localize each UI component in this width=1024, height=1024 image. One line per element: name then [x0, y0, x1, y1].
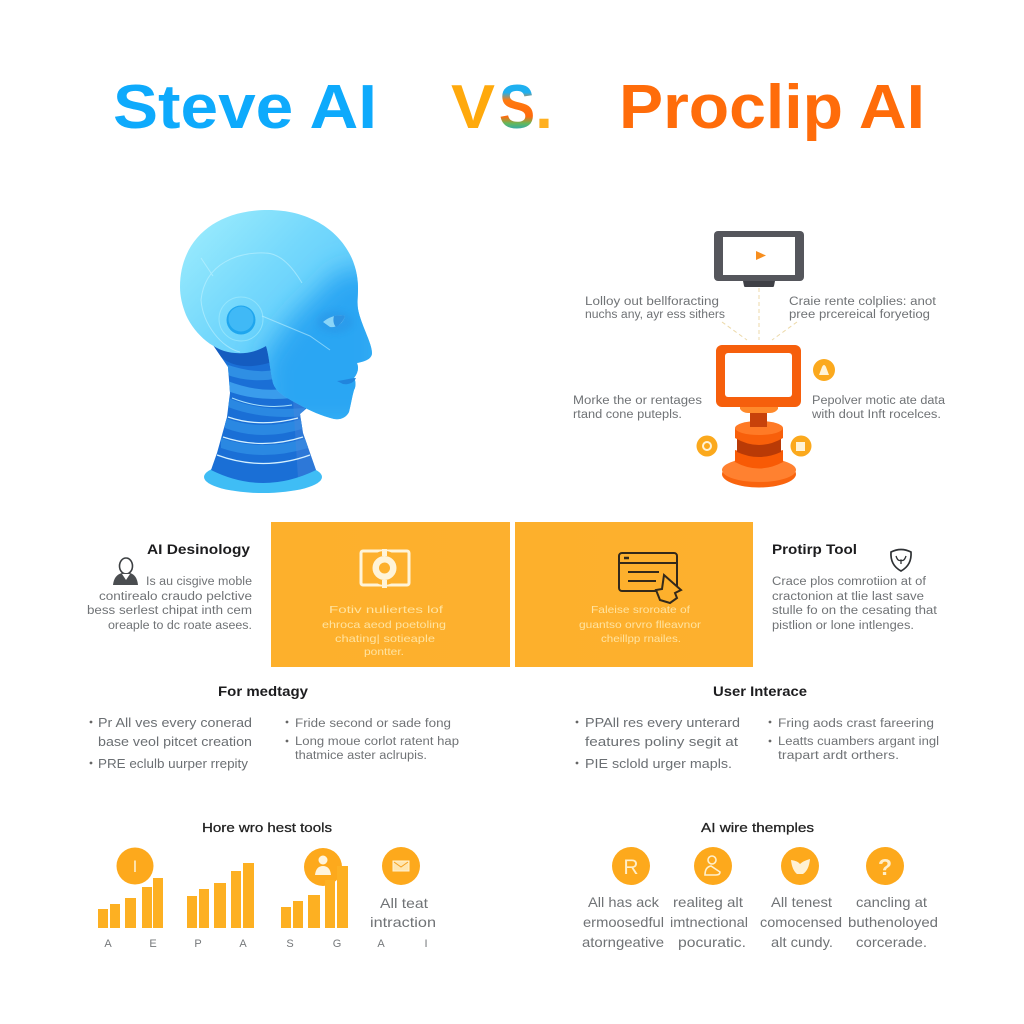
- card text: ehroca aeod poetoling: [322, 619, 446, 631]
- body text: stulle fo on the cesating that: [772, 605, 938, 617]
- callout: top left: nuchs any, ayr ess sithers: [585, 309, 725, 321]
- body text: contirealo craudo pelctive: [99, 591, 252, 603]
- column 3 text: alt cundy.: [771, 934, 833, 950]
- caption: [370, 895, 436, 930]
- bar chart 1: I: [133, 857, 137, 876]
- card text: [579, 604, 702, 645]
- body text: pistlion or lone intlenges.: [772, 620, 914, 632]
- column 2 text: imtnectional: [670, 914, 748, 930]
- bullet list right: Fride second or sade fong: [295, 718, 451, 730]
- panel: orange feature card left: [271, 522, 510, 667]
- card text: Faleise sroroate of: [591, 604, 690, 616]
- icon: question badge: ?: [878, 854, 892, 880]
- column 4 text: [848, 894, 938, 950]
- panel: Protirp Tool description: [772, 542, 938, 632]
- bullet list right: [769, 718, 939, 762]
- bullet list right: trapart ardt orthers.: [778, 750, 899, 762]
- bullet list left: PIE sclold urger mapls.: [585, 757, 732, 771]
- bullet list right: Long moue corlot ratent hap: [295, 736, 459, 748]
- bullet list left: [576, 716, 740, 771]
- bullet list left: PRE eclulb uurper rrepity: [98, 757, 249, 771]
- icon: dark monitor with play button: [714, 231, 804, 287]
- heading: User Interace: [713, 684, 808, 699]
- bullet list left: [90, 716, 252, 771]
- title: Proclip AI: Proclip AI: [619, 73, 925, 142]
- title: VS.: .: [535, 73, 553, 142]
- callout: lower right: with dout Inft rocelces.: [811, 409, 941, 421]
- card text: cheillpp rnailes.: [601, 633, 681, 645]
- heading: AI Desinology: [147, 542, 251, 557]
- callout: lower left: rtand cone putepls.: [573, 409, 682, 421]
- icon: letter badge: [612, 847, 650, 885]
- title: Steve AI: Steve AI: [113, 73, 377, 142]
- icon: letter badge: R: [623, 856, 639, 879]
- axis letters: S: [286, 938, 294, 950]
- column 2 text: [670, 894, 748, 950]
- bullet list left: features poliny segit at: [585, 735, 739, 749]
- icon: bell badge: [813, 359, 835, 381]
- heading: Hore wro hest tools: [202, 820, 333, 835]
- column 2 text: realiteg alt: [673, 894, 743, 910]
- axis letters: A: [104, 938, 112, 950]
- axis letters: P: [194, 938, 202, 950]
- card text: pontter.: [364, 646, 404, 658]
- column 4 text: buthenoloyed: [848, 914, 938, 930]
- axis letters: I: [424, 938, 428, 950]
- card text: Fotiv nuliertes lof: [329, 604, 443, 616]
- title: VS.: S: [499, 73, 535, 142]
- bullet list left: base veol pitcet creation: [98, 735, 252, 749]
- column 3 text: [760, 894, 842, 950]
- infographic: [88, 83, 946, 950]
- callout: lower left: [573, 395, 702, 421]
- card text: chating| sotieaple: [335, 633, 435, 645]
- caption: All teat: [380, 895, 428, 911]
- section: User Interace: [576, 684, 939, 771]
- bullet list right: Fring aods crast fareering: [778, 718, 934, 730]
- icon: browser window with cursor: [619, 553, 681, 603]
- section: AI wire themples: [582, 820, 938, 950]
- icon: person badge: [694, 847, 732, 885]
- callout: top right: [789, 296, 937, 321]
- title: VS.: [451, 73, 553, 142]
- icon: gear: [361, 549, 409, 588]
- bullet list left: PPAll res every unterard: [585, 716, 740, 730]
- callout: lower left: Morke the or rentages: [573, 395, 702, 407]
- card text: guantso orvro flleavnor: [579, 619, 702, 631]
- callout: top right: pree prcereical foryetiog: [789, 309, 930, 321]
- body text: cractonion at tlie last save: [772, 591, 924, 603]
- body text: [772, 576, 938, 632]
- callout: top left: [585, 296, 725, 321]
- body text: oreaple to dc roate asees.: [108, 620, 252, 632]
- bullet list right: [286, 718, 459, 762]
- title: VS.: V: [451, 73, 495, 142]
- neck and base: [204, 346, 322, 493]
- icon: question badge: [866, 847, 904, 885]
- icon: orange monitor on stacked stand: [716, 345, 801, 488]
- lips: [337, 378, 356, 384]
- bullet list right: Leatts cuambers argant ingl: [778, 736, 939, 748]
- head shape: [180, 210, 372, 420]
- icon: mail badge: [382, 847, 420, 885]
- circuit lines: [201, 253, 330, 352]
- ear: [219, 297, 263, 341]
- axis letters: [104, 938, 428, 950]
- icon: person: [113, 558, 138, 585]
- caption: intraction: [370, 914, 436, 930]
- panel: AI Desinology description: [87, 542, 252, 632]
- axis letters: G: [333, 938, 341, 950]
- axis letters: A: [377, 938, 385, 950]
- body text: [87, 576, 252, 632]
- eye: [323, 315, 345, 327]
- icon: swirl badge: [696, 436, 718, 456]
- body text: Crace plos comrotiion at of: [772, 576, 927, 588]
- illustration: blue AI head: [180, 210, 372, 493]
- callout: top left: Lolloy out bellforacting: [585, 296, 719, 308]
- section: For medtagy: [90, 684, 459, 771]
- bullet list left: Pr All ves every conerad: [98, 716, 252, 730]
- callout: lower right: Pepolver motic ate data: [812, 395, 946, 407]
- column 4 text: corcerade.: [856, 934, 927, 950]
- bar chart 1: [98, 848, 163, 928]
- bar chart 3: [281, 848, 348, 928]
- column 1 text: ermoosedful: [583, 914, 664, 930]
- icon: book badge: [790, 436, 812, 456]
- bullet list right: thatmice aster aclrupis.: [295, 750, 427, 762]
- column 2 text: pocuratic.: [678, 934, 746, 950]
- section: tools bar charts: [98, 820, 436, 950]
- heading: Protirp Tool: [772, 542, 857, 557]
- card text: [322, 604, 446, 658]
- axis letters: A: [239, 938, 247, 950]
- column 1 text: [582, 894, 664, 950]
- illustration: Proclip monitor diagram: [573, 231, 946, 488]
- icon: shield: [891, 550, 911, 571]
- column 1 text: atorngeative: [582, 934, 664, 950]
- body text: Is au cisgive moble: [146, 576, 252, 588]
- axis letters: E: [149, 938, 157, 950]
- heading: For medtagy: [218, 684, 309, 699]
- bar chart 2: [187, 863, 254, 928]
- callout: top right: Craie rente colplies: anot: [789, 296, 937, 308]
- body text: bess serlest chipat inth cem: [87, 605, 252, 617]
- column 1 text: All has ack: [588, 894, 660, 910]
- title: [113, 73, 925, 142]
- icon: bird badge: [781, 847, 819, 885]
- callout: lower right: [811, 395, 946, 421]
- column 3 text: All tenest: [771, 894, 832, 910]
- heading: AI wire themples: [701, 820, 815, 835]
- column 4 text: cancling at: [856, 894, 927, 910]
- column 3 text: comocensed: [760, 914, 842, 930]
- panel: orange feature card right: [515, 522, 753, 667]
- dashed connectors: [722, 288, 797, 340]
